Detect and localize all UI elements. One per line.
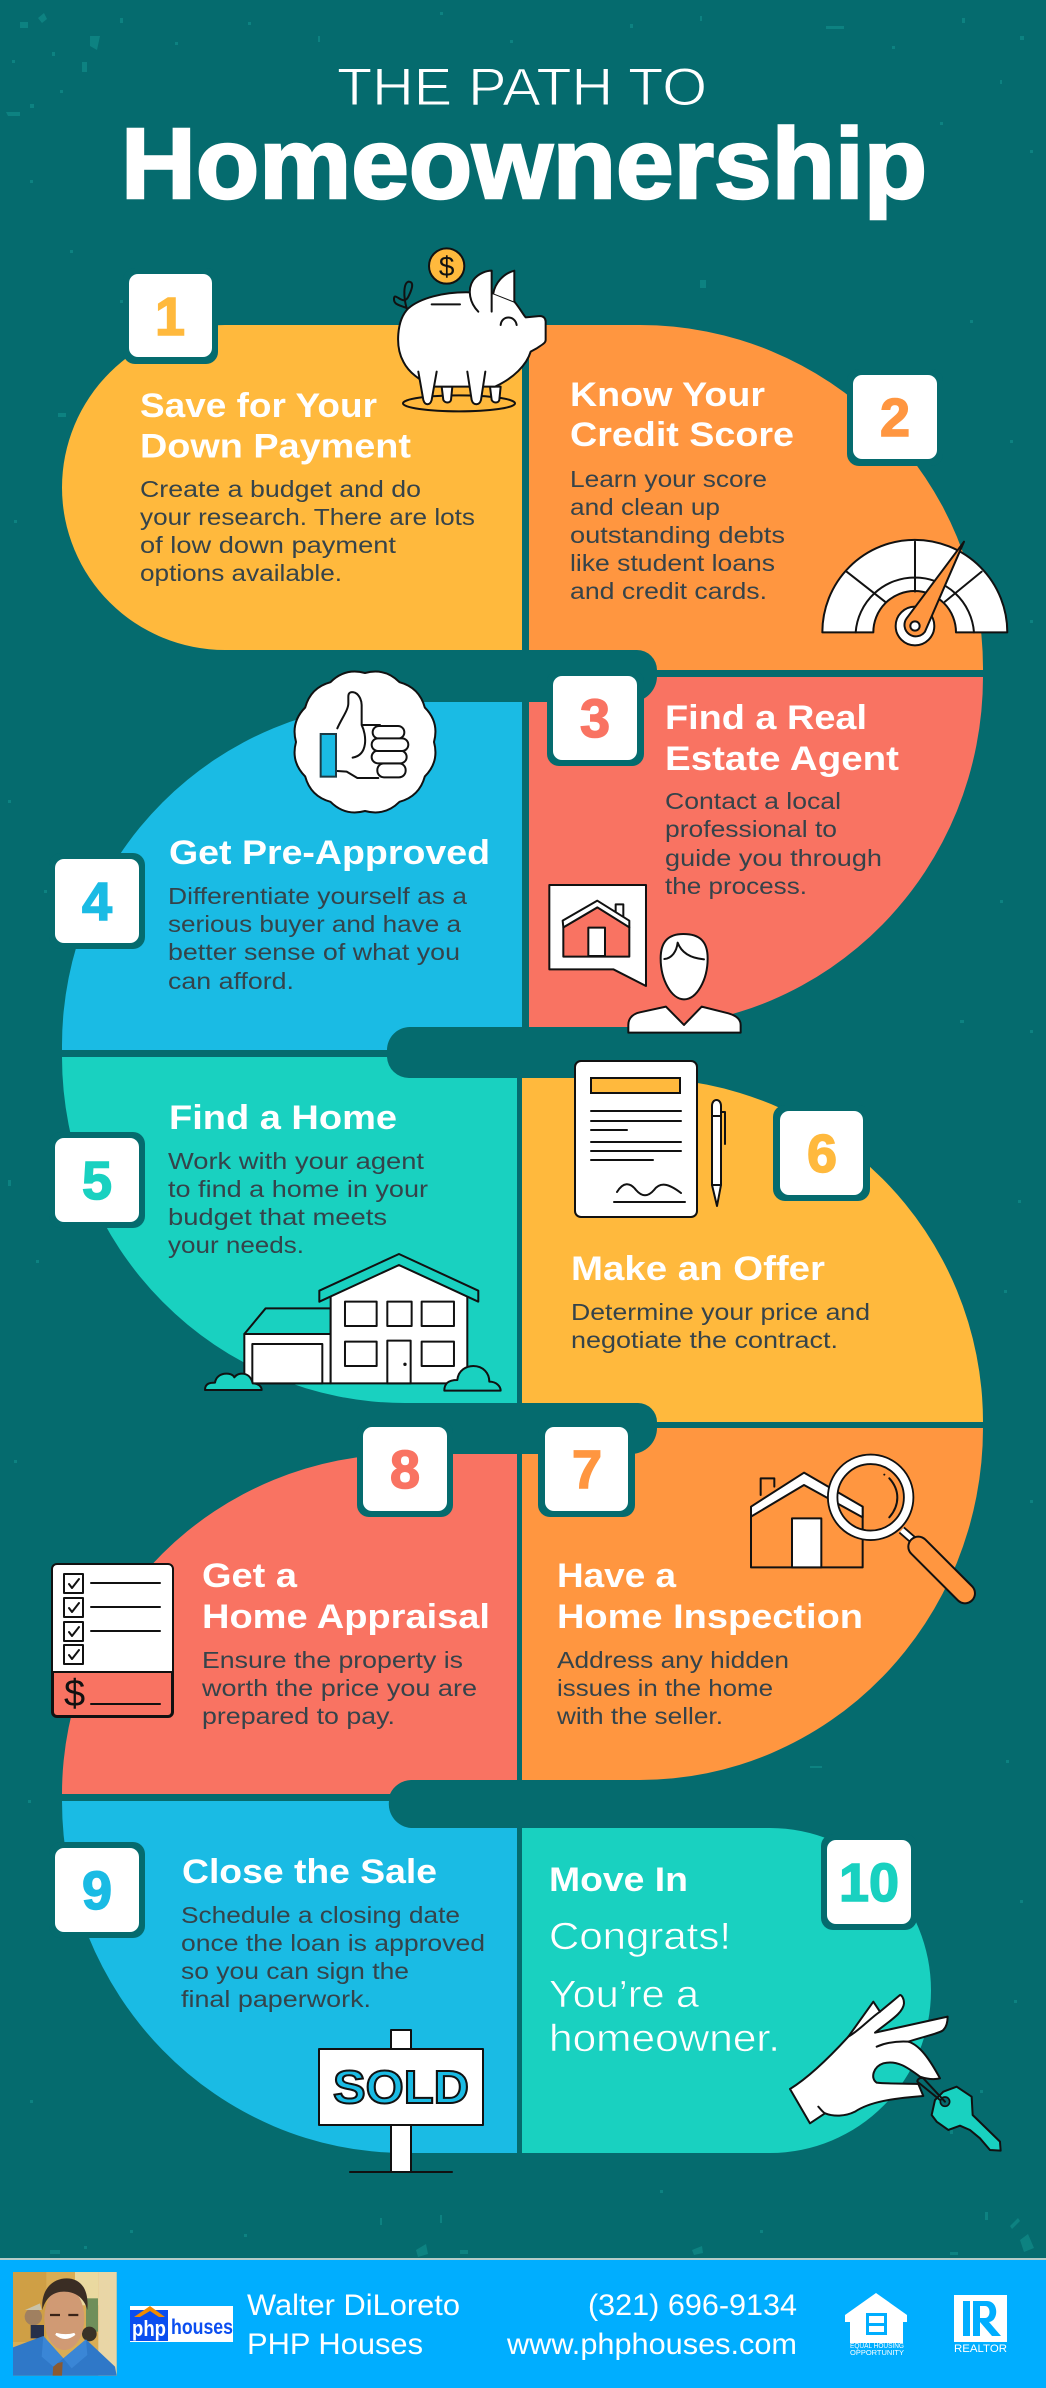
contact details: www.phphouses.com [506, 2328, 797, 2361]
body text: worth the price you are [201, 1675, 477, 1701]
heading: Close the Sale [182, 1853, 437, 1891]
body text: your needs. [168, 1232, 304, 1258]
icon: piggy bank: $ [439, 251, 455, 282]
body text: Determine your price and [571, 1299, 870, 1325]
php houses logo: houses [171, 2316, 233, 2339]
body text: issues in the home [557, 1675, 773, 1701]
contact details: (321) 696-9134 [588, 2289, 797, 2322]
icon: sold sign [319, 2030, 483, 2172]
body text [181, 1902, 485, 2012]
number badge 7: 7 [572, 1440, 602, 1500]
heading: Home Inspection [557, 1598, 863, 1636]
title [121, 58, 927, 220]
icon: sold sign: SOLD [333, 2061, 469, 2113]
heading: Find a Real [665, 699, 867, 737]
panel: step 5 find a home [49, 1057, 517, 1403]
body text: Differentiate yourself as a [168, 883, 467, 909]
heading [202, 1557, 490, 1636]
panel: step 7 home inspection [522, 1421, 983, 1780]
number badge 3: 3 [580, 689, 610, 749]
number badge 8 [357, 1421, 453, 1517]
body text: Ensure the property is [202, 1647, 463, 1673]
body text [570, 466, 785, 604]
heading: Get a [202, 1557, 298, 1595]
body text [665, 788, 882, 899]
heading [570, 376, 794, 454]
heading: Move In [549, 1861, 688, 1899]
body text: Contact a local [665, 788, 841, 814]
heading: Have a [557, 1557, 677, 1595]
heading: Make an Offer [571, 1250, 825, 1288]
body text: Create a budget and do [140, 476, 421, 502]
body text [571, 1299, 870, 1353]
number badge 5 [49, 1132, 145, 1228]
agent name and company: PHP Houses [247, 2328, 423, 2361]
heading: Get Pre-Approved [169, 834, 490, 872]
body text: outstanding debts [570, 522, 785, 548]
body text: and clean up [570, 494, 720, 520]
heading: Save for Your [140, 387, 377, 425]
heading: Credit Score [570, 416, 794, 454]
body text: Address any hidden [557, 1647, 789, 1673]
agent name and company: Walter DiLoreto [247, 2289, 460, 2322]
icon: equal housing opportunity: EQUAL HOUSING [850, 2343, 904, 2350]
body text [168, 1148, 428, 1258]
number badge 10: 10 [839, 1853, 899, 1913]
title line 2: Homeownership [121, 108, 927, 220]
number badge 4: 4 [82, 872, 112, 932]
number badge 6 [773, 1105, 870, 1201]
number badge 9 [49, 1842, 145, 1938]
panel: step 3 real estate agent [529, 670, 983, 1033]
body text: negotiate the contract. [571, 1327, 838, 1353]
icon: realtor mark: REALTOR [954, 2343, 1007, 2355]
body text: of low down payment [140, 532, 397, 558]
panel: step 6 make an offer [522, 1061, 983, 1422]
number badge 8: 8 [390, 1440, 420, 1500]
body text: guide you through [665, 845, 882, 871]
heading [557, 1557, 863, 1636]
body text: can afford. [168, 968, 294, 994]
heading [140, 387, 411, 466]
body text: and credit cards. [570, 578, 767, 604]
title line 1: THE PATH TO [337, 58, 707, 117]
number badge 7 [538, 1421, 635, 1517]
icon: equal housing opportunity [845, 2293, 907, 2357]
body text [140, 476, 475, 586]
body text: so you can sign the [181, 1958, 409, 1984]
body text: with the seller. [556, 1703, 723, 1729]
icon: realtor mark [954, 2295, 1007, 2355]
body text: prepared to pay. [202, 1703, 395, 1729]
number badge 10 [821, 1834, 917, 1930]
agent photo [13, 2272, 117, 2376]
icon: piggy bank [394, 248, 546, 411]
panel: step 1 save for down payment [62, 268, 522, 650]
body text: your research. There are lots [140, 504, 475, 530]
body text: the process. [665, 873, 807, 899]
icon: house under magnifying glass [751, 1459, 965, 1593]
body text: serious buyer and have a [168, 911, 461, 937]
number badge 5: 5 [82, 1151, 112, 1211]
panel: step 9 close the sale [49, 1801, 517, 2172]
icon: appraisal checklist [52, 1564, 173, 1717]
body text: final paperwork. [181, 1986, 371, 2012]
heading [665, 699, 899, 778]
icon: contract and pen [575, 1061, 725, 1217]
icon: house with garage [205, 1254, 501, 1391]
heading: Down Payment [140, 428, 411, 466]
contact details [506, 2289, 797, 2361]
body text: better sense of what you [168, 939, 460, 965]
panel: step 8 home appraisal [52, 1421, 517, 1794]
body text [556, 1647, 789, 1729]
body text: options available. [140, 560, 342, 586]
congratulations text: You’re a [549, 1974, 700, 2016]
panel: step 4 pre-approved [49, 672, 522, 1050]
icon: thumbs up badge [295, 672, 435, 812]
body text: to find a home in your [168, 1176, 428, 1202]
congratulations text [549, 1916, 780, 2060]
panel: step 2 credit score [529, 325, 1007, 670]
icon: agent with speech bubble [549, 885, 741, 1033]
body text: Schedule a closing date [181, 1902, 460, 1928]
icon: hand holding key [790, 1995, 1001, 2151]
icon: credit gauge [822, 540, 1007, 645]
number badge 1: 1 [155, 287, 185, 347]
body text [168, 883, 467, 994]
body text: once the loan is approved [181, 1930, 485, 1956]
heading: Estate Agent [665, 740, 899, 778]
footer bar [0, 2258, 1046, 2388]
body text: like student loans [570, 550, 775, 576]
panel: step 10 move in [522, 1828, 1001, 2153]
icon: appraisal checklist: $ [64, 1673, 85, 1715]
number badge 1 [123, 268, 218, 364]
body text: Learn your score [570, 466, 767, 492]
congratulations text: homeowner. [549, 2018, 780, 2060]
heading: Know Your [570, 376, 765, 414]
number badge 3 [547, 670, 644, 766]
body text: budget that meets [168, 1204, 387, 1230]
body text [201, 1647, 477, 1729]
number badge 2 [847, 369, 943, 466]
heading: Home Appraisal [202, 1598, 490, 1636]
congratulations text: Congrats! [549, 1916, 731, 1958]
number badge 2: 2 [880, 388, 910, 448]
agent name and company [247, 2289, 460, 2361]
number badge 4 [49, 853, 145, 949]
php houses logo: php [132, 2316, 166, 2341]
php houses logo [130, 2306, 233, 2342]
body text: professional to [665, 816, 837, 842]
body text: Work with your agent [168, 1148, 425, 1174]
heading: Find a Home [169, 1099, 397, 1137]
number badge 6: 6 [807, 1124, 837, 1184]
number badge 9: 9 [82, 1861, 112, 1921]
icon: equal housing opportunity: OPPORTUNITY [850, 2350, 904, 2357]
